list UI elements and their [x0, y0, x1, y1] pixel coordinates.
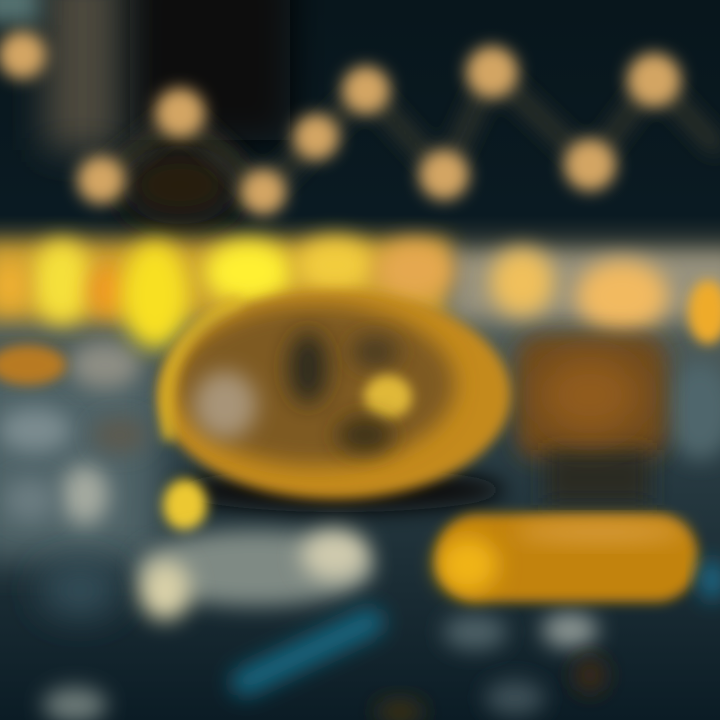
background: upper dark area: [0, 0, 720, 225]
jar: amber container on the right: [516, 335, 666, 505]
coin: large golden coin: [159, 291, 511, 531]
bright band of yellow and orange lights: [0, 237, 720, 385]
gold bar: orange pill at lower right: [436, 514, 698, 602]
background: lower grey and teal bokeh: [0, 341, 720, 720]
blue streak: [245, 560, 720, 682]
silver bar: pale blurred shape at lower left: [137, 529, 373, 620]
bokeh lights along rising line: [0, 31, 681, 215]
